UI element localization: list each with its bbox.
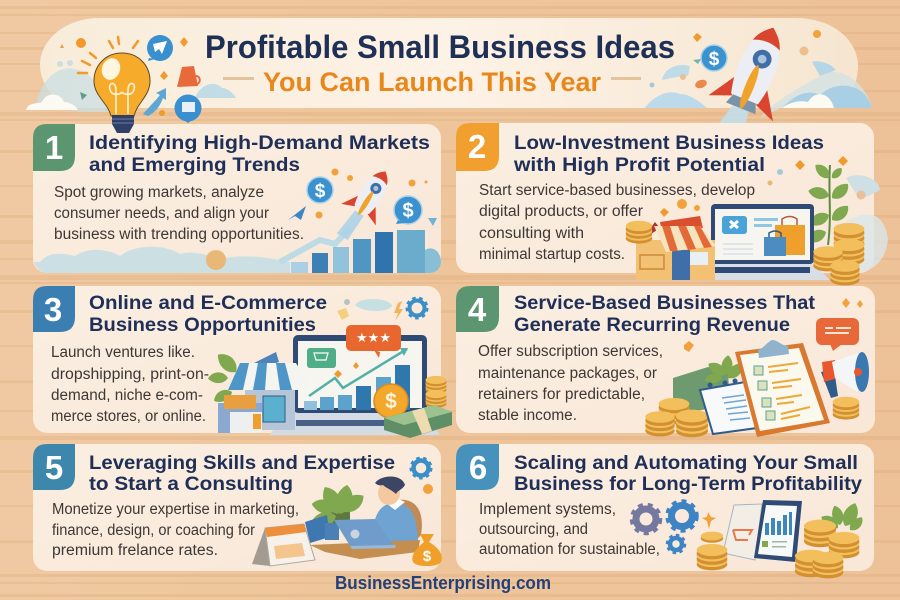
coin on store [626, 221, 652, 244]
dollar coin: $ [385, 390, 397, 413]
heading: Low-Investment Business Ideas [514, 132, 824, 154]
calendar [252, 524, 315, 566]
plant [820, 501, 866, 533]
icon: light bulb [78, 37, 150, 133]
coin stacks [813, 223, 864, 285]
body text: Start service-based businesses, develop [479, 182, 755, 199]
number badge: 1 [45, 129, 63, 166]
laptop with chart [270, 335, 440, 435]
heading: Business Opportunities [89, 314, 316, 336]
panel 6 [456, 444, 874, 578]
background accents [660, 156, 888, 272]
icon: blue arrow bubble [147, 35, 173, 61]
dollar coin [374, 384, 408, 418]
body text: retainers for predictable, [478, 386, 645, 403]
body text: minimal startup costs. [479, 246, 625, 263]
folders [305, 515, 339, 543]
body text: outsourcing, and [479, 521, 588, 538]
documents and tablet [723, 500, 802, 562]
panel 5 [33, 444, 442, 571]
panel background [33, 124, 441, 273]
watercolor clouds [34, 247, 290, 273]
body text: stable income. [478, 407, 577, 424]
icon: dollar coin [701, 45, 727, 71]
icon: blue folder bubble [174, 94, 202, 123]
dollar bubble right: $ [402, 200, 414, 222]
header left decoration clouds [26, 38, 236, 112]
icon: dollar coin: $ [709, 49, 720, 70]
panel 1 [33, 124, 441, 273]
dollar bubble right [394, 196, 422, 224]
dollar bubble left [307, 177, 333, 203]
consultant at laptop [372, 476, 422, 545]
body text: dropshipping, print-on- [51, 366, 209, 383]
body text [479, 182, 755, 263]
number badge: 5 [45, 449, 63, 486]
heading [89, 292, 327, 336]
money bag [412, 534, 442, 566]
panel background [33, 444, 441, 571]
body text: Implement systems, [479, 501, 616, 518]
heading: and Emerging Trends [89, 154, 300, 176]
star rating bubble [346, 325, 401, 358]
body text: consulting with [479, 225, 584, 242]
header left icons [143, 35, 202, 123]
icon: orange bag [177, 66, 200, 87]
body text: Spot growing markets, analyze [54, 184, 264, 201]
number badge [33, 444, 75, 490]
gear and accents [337, 298, 427, 321]
body text: business with trending opportunities. [54, 226, 304, 243]
plant [309, 483, 367, 529]
number badge [456, 444, 499, 490]
heading: with High Profit Potential [513, 154, 765, 176]
body text: maintenance packages, or [478, 365, 657, 382]
laptop [695, 204, 830, 280]
notebook [700, 378, 757, 434]
heading: Generate Recurring Revenue [514, 314, 790, 336]
subtitle: You Can Launch This Year [263, 67, 601, 97]
number badge: 6 [469, 449, 487, 486]
body text [54, 184, 304, 243]
rocket [327, 161, 403, 249]
title: Profitable Small Business Ideas [205, 29, 675, 65]
body text: automation for sustainable, [479, 541, 660, 558]
laptop [334, 519, 396, 549]
heading [89, 132, 430, 176]
icon: growth arrow [143, 88, 166, 116]
panel background [456, 444, 874, 571]
body text: premium frelance rates. [52, 542, 218, 559]
store [218, 352, 309, 433]
body text: merce stores, or online. [51, 408, 206, 425]
number badge [456, 123, 499, 171]
heading [514, 292, 816, 336]
store [636, 216, 716, 280]
body text: digital products, or offer [479, 203, 643, 220]
body text: Monetize your expertise in marketing, [52, 501, 299, 518]
number badge: 2 [468, 128, 486, 165]
clipboard [735, 340, 830, 437]
header banner [40, 18, 858, 108]
header right decoration [645, 30, 872, 118]
plant [704, 354, 746, 385]
plant [805, 161, 852, 245]
footer website: BusinessEnterprising.com [335, 573, 551, 593]
body text: consumer needs, and align your [54, 205, 269, 222]
number badge [33, 124, 75, 171]
panel 3 [33, 286, 452, 438]
bar chart [280, 228, 441, 273]
number badge [456, 286, 499, 332]
heading [514, 452, 862, 495]
paper plane [288, 206, 306, 220]
coin stacks [697, 520, 859, 578]
panel 2 [456, 123, 888, 285]
panel background [456, 286, 875, 433]
cash stack [384, 405, 452, 438]
cash stack [673, 367, 730, 412]
star rating bubble: ★★★ [356, 330, 391, 345]
heading: Online and E-Commerce [89, 292, 327, 314]
dollar bubble left: $ [315, 181, 326, 202]
number badge [33, 286, 75, 332]
subtitle rules [223, 77, 641, 80]
heading: Business for Long-Term Profitability [514, 473, 862, 495]
leaves [207, 349, 240, 403]
body text [51, 344, 209, 425]
heading [513, 132, 824, 176]
coin stack [426, 376, 446, 408]
heading: Identifying High-Demand Markets [89, 132, 430, 154]
number badge: 4 [468, 291, 487, 328]
panel 4 [456, 286, 875, 437]
gear [411, 458, 431, 478]
heading [89, 452, 395, 495]
money bag: $ [423, 548, 432, 565]
body text [52, 501, 299, 559]
number badge: 3 [44, 291, 62, 328]
coin stacks [645, 397, 859, 437]
heading: Scaling and Automating Your Small [514, 452, 858, 474]
body text: demand, niche e-com- [51, 387, 203, 404]
panel background [456, 123, 874, 273]
gears [632, 501, 716, 553]
panel background [33, 286, 441, 433]
desk [310, 540, 420, 559]
body text: Launch ventures like. [51, 344, 195, 361]
body text: Offer subscription services, [478, 343, 663, 360]
body text [479, 501, 660, 558]
icon: header rocket [692, 15, 806, 162]
heading: Service-Based Businesses That [514, 292, 816, 314]
megaphone [821, 352, 869, 398]
sparkles [684, 298, 863, 352]
body text [478, 343, 663, 424]
speech bubble [816, 318, 859, 351]
heading: to Start a Consulting [89, 473, 293, 495]
heading: Leveraging Skills and Expertise [89, 452, 395, 474]
body text: finance, design, or coaching for [52, 522, 255, 539]
